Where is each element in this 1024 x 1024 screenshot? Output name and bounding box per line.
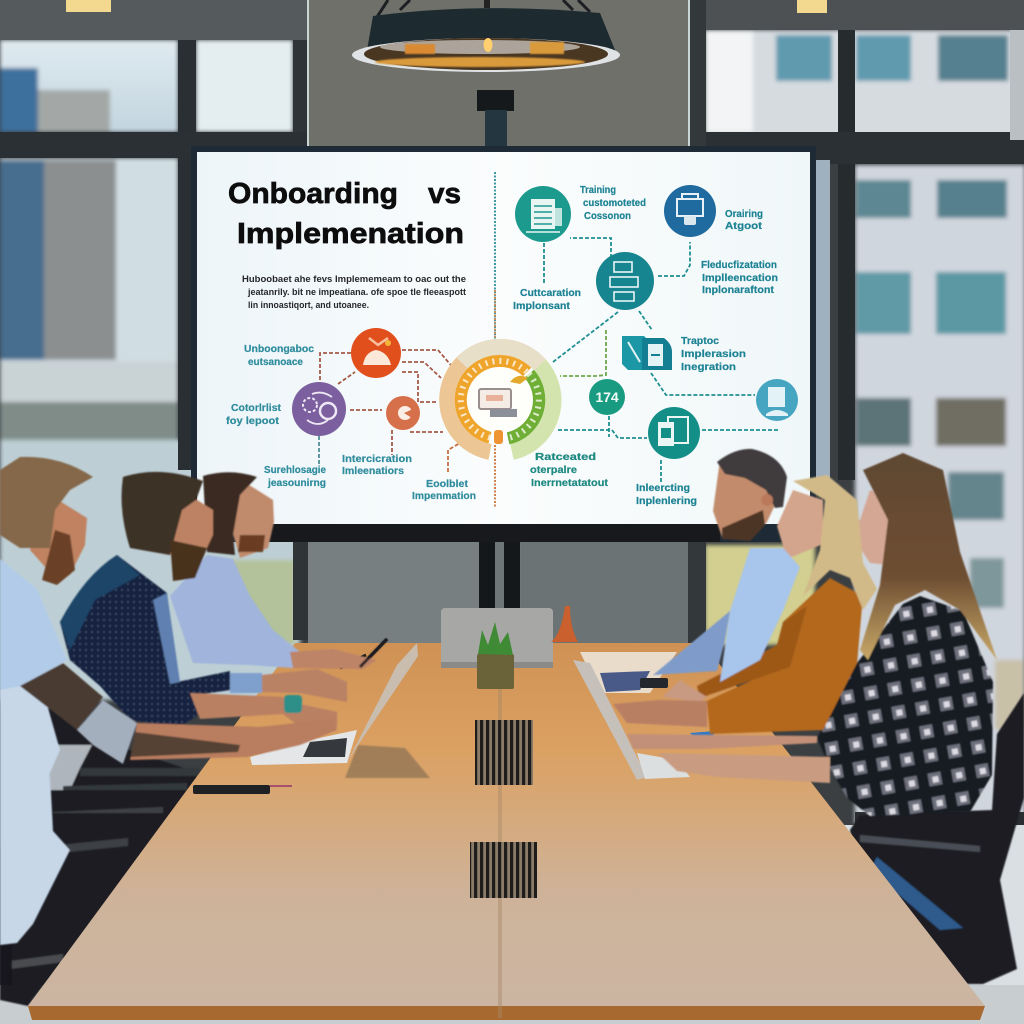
- screen intro paragraph: jeatanrily. bit ne impeatiana. ofe spoe tle fleeaspott: [247, 287, 467, 298]
- center laptop and desk items: [441, 606, 578, 689]
- screen title: Onboarding vs Implementation: [228, 178, 464, 250]
- icon: teal workflow hub: [596, 252, 654, 310]
- labels: right diagram: Traptoc: [681, 336, 720, 347]
- left laptop: [193, 639, 418, 794]
- labels: right diagram: customoteted: [583, 198, 646, 209]
- person: blonde woman in brown jacket: [613, 475, 877, 734]
- icon: teal folder: [622, 336, 672, 370]
- office chairs: [0, 690, 1024, 1006]
- labels: left diagram: Eoolblet: [426, 479, 469, 490]
- labels: right diagram: Orairing: [725, 209, 763, 220]
- table cable vents: [470, 720, 537, 898]
- labels: right diagram: [513, 185, 778, 507]
- labels: left diagram: jeasounirng: [267, 478, 326, 489]
- central ring hub: [447, 347, 553, 452]
- presentation screen: [191, 146, 816, 542]
- labels: right diagram: Inegration: [681, 362, 736, 373]
- badge: 174: [589, 379, 625, 415]
- dashed connector lines: right diagram: [544, 238, 778, 482]
- labels: left diagram: [226, 344, 476, 502]
- person: man in pale blue shirt: [653, 449, 800, 682]
- labels: right diagram: oterpalre: [530, 465, 578, 476]
- right laptop and tablet: [573, 660, 716, 780]
- labels: left diagram: Imleenatiors: [342, 466, 405, 477]
- labels: left diagram: foy lepoot: [226, 416, 280, 427]
- labels: right diagram: Implonsant: [513, 301, 571, 312]
- labels: left diagram: Impenmation: [412, 491, 476, 502]
- central dashed divider: [494, 172, 496, 508]
- screen intro paragraph: [242, 274, 467, 311]
- screen title: Onboarding vs Implementation: vs: [428, 178, 461, 210]
- labels: right diagram: Inplonaraftont: [702, 285, 775, 296]
- icon: orange gear and dome: [351, 328, 401, 378]
- screen intro paragraph: Huboobaet ahe fevs Implememeam to oac out the: [242, 274, 466, 285]
- icon: blue monitor: [756, 379, 798, 421]
- dashed connector lines: left diagram: [319, 350, 460, 472]
- person: bearded man in dark dotted shirt: [60, 472, 347, 727]
- icon: teal documents: [648, 407, 700, 459]
- screen title: Onboarding vs Implementation: Implemenation: [237, 218, 464, 250]
- labels: right diagram: Inerrnetatatout: [531, 478, 609, 489]
- people on the left side of the table: [0, 457, 387, 945]
- labels: right diagram: Fleducfizatation: [701, 260, 777, 271]
- screen title: Onboarding vs Implementation: Onboarding: [228, 178, 398, 210]
- person: long-haired man in blue shirt: [170, 472, 387, 669]
- meeting table: [28, 643, 985, 1020]
- labels: right diagram: Implleencation: [702, 273, 778, 284]
- labels: right diagram: Ratceated: [535, 452, 596, 463]
- person: woman in plaid shirt: [627, 453, 997, 816]
- ceiling pendant lamp: [352, 0, 620, 148]
- labels: right diagram: Inleercting: [636, 483, 690, 494]
- labels: left diagram: eutsanoace: [248, 357, 304, 368]
- badge: 174: 174: [595, 389, 619, 405]
- icon: navy toolbox: [664, 185, 716, 237]
- icon: clay pie: [386, 396, 420, 430]
- icon: purple gears: [292, 382, 346, 436]
- labels: left diagram: Surehlosagie: [264, 465, 327, 476]
- labels: right diagram: Atgoot: [725, 221, 763, 232]
- labels: left diagram: Intercicration: [342, 454, 412, 465]
- labels: right diagram: Implerasion: [681, 349, 746, 360]
- labels: left diagram: Cotorlrlist: [231, 403, 282, 414]
- labels: right diagram: Training: [580, 185, 616, 196]
- people on the right side of the table: [613, 449, 997, 816]
- labels: right diagram: Inplenlering: [636, 496, 697, 507]
- icon: teal document: [515, 186, 571, 242]
- labels: right diagram: Cossonon: [584, 211, 631, 222]
- person: tattooed man in pale shirt: [0, 457, 337, 945]
- labels: right diagram: Cuttcaration: [520, 288, 581, 299]
- screen intro paragraph: lin innoastiqort, and utoanee.: [248, 300, 369, 311]
- labels: left diagram: Unboongaboc: [244, 344, 315, 355]
